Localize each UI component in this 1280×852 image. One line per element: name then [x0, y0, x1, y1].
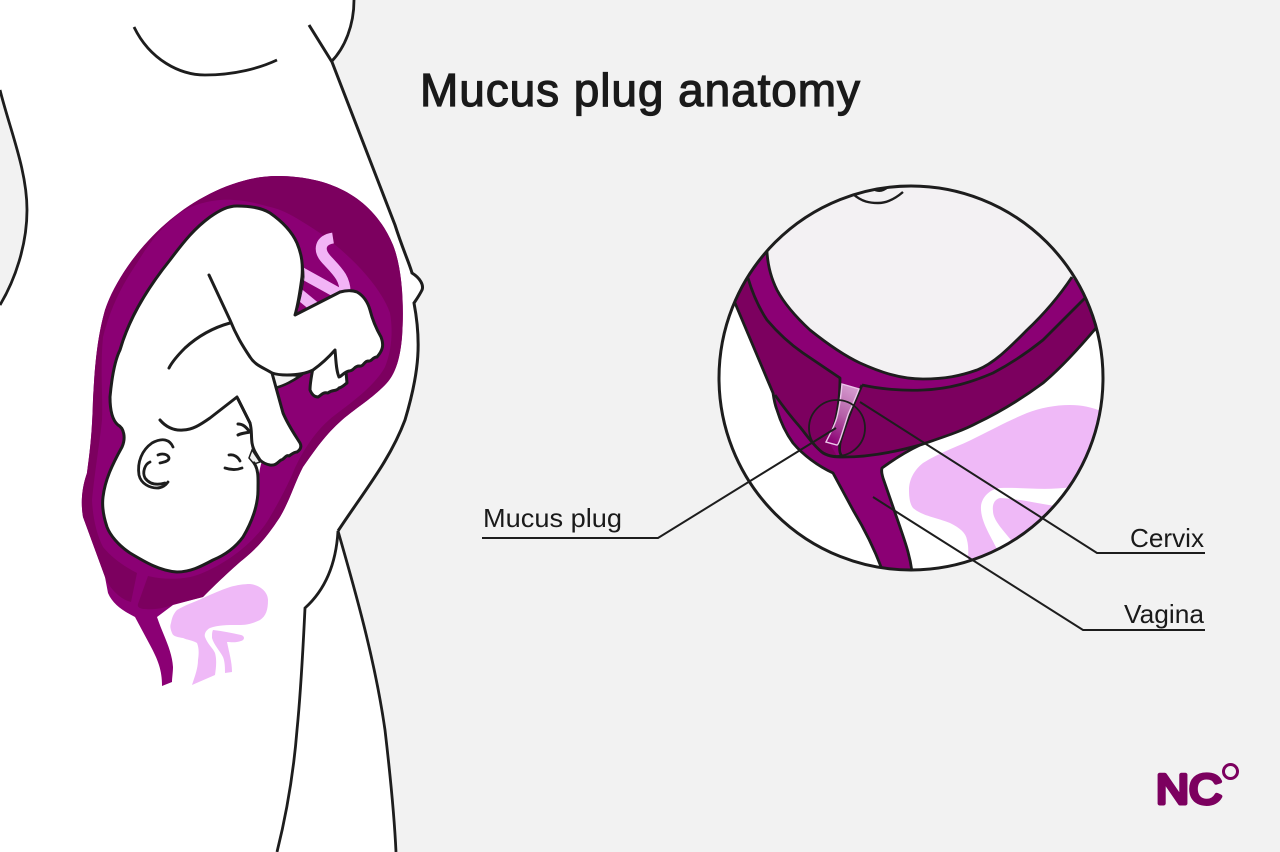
fetus [103, 206, 383, 572]
pelvic organ: bladder and uterus area [170, 584, 268, 685]
lens top fragment [853, 187, 903, 203]
mucus plug [826, 384, 859, 445]
back contour highlight [293, 234, 304, 308]
lens uterine wall [741, 254, 1084, 568]
lens border [719, 186, 1103, 570]
lens pink organ [909, 405, 1099, 560]
lens dark wall [735, 278, 840, 458]
lens contents [734, 188, 1099, 568]
magnified lens circle [719, 170, 1115, 590]
title: Mucus plug anatomy [420, 64, 860, 116]
fetus face: ear, eye [139, 440, 242, 488]
lens uterine interior [768, 188, 1072, 378]
callout: mucus plug [482, 428, 836, 538]
lens outlines [735, 252, 1096, 572]
callout: mucus plug: Mucus plug [483, 503, 622, 533]
uterus [82, 176, 403, 686]
small zoom circle around mucus plug [809, 400, 865, 456]
main body [103, 206, 383, 572]
belly fold [270, 372, 300, 388]
logo: NC: NC [1156, 766, 1222, 812]
callout: cervix [860, 402, 1205, 553]
pregnant body silhouette [0, 0, 423, 852]
lens white channel [981, 487, 1072, 549]
callout: vagina: Vagina [1124, 599, 1205, 629]
callout: vagina [873, 497, 1205, 630]
callout: cervix: Cervix [1130, 523, 1204, 553]
second foot [310, 350, 347, 397]
umbilical cord [299, 238, 345, 308]
